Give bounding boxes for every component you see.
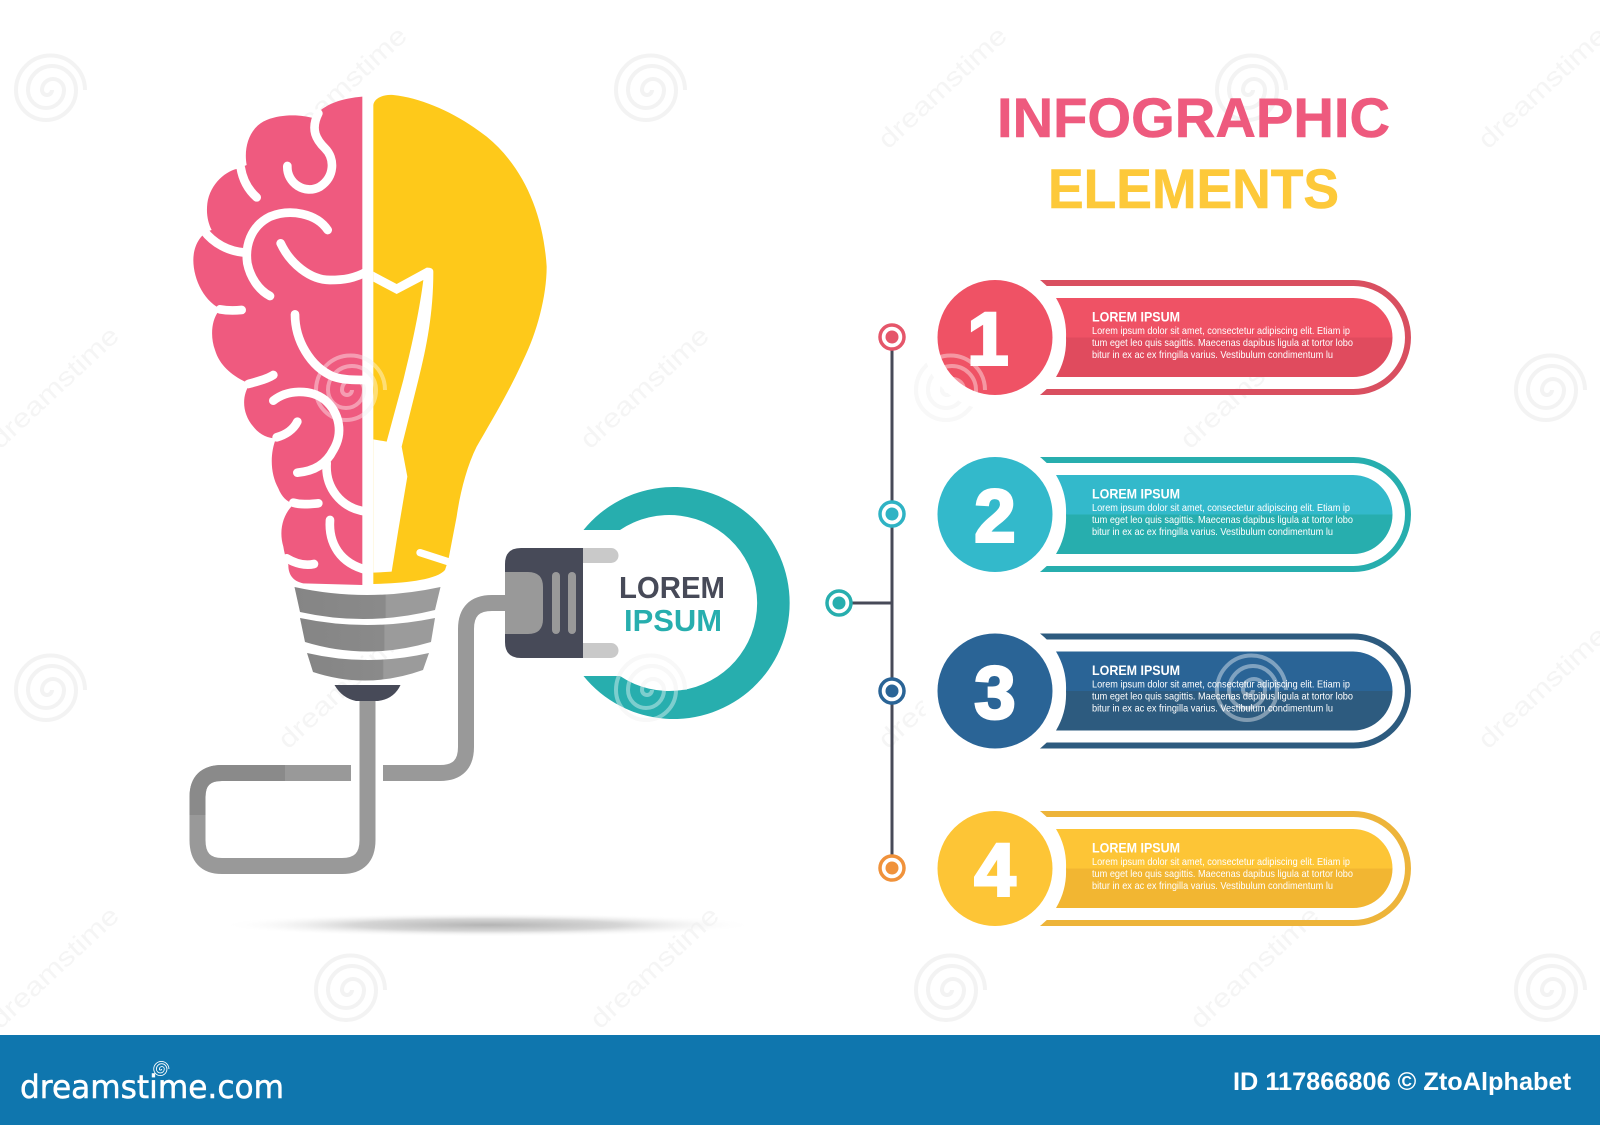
panel: step 1: LOREM IPSUM	[1092, 308, 1180, 324]
ring label: IPSUM	[624, 603, 722, 638]
watermark: background spirals and text: dreamstime	[1472, 20, 1600, 154]
watermark: background spirals and text: dreamstime	[1472, 620, 1600, 754]
panel: step 4: LOREM IPSUM	[1092, 840, 1180, 856]
title	[997, 86, 1390, 220]
panel: step 3	[922, 618, 1408, 764]
panel: step 4: bitur in ex ac ex fringilla varius. Vestibulum condimentum lu	[1092, 880, 1333, 892]
panel: step 4	[922, 796, 1408, 942]
panel: step 3: 3	[974, 651, 1016, 734]
watermark: background spirals and text: dreamstime	[1174, 320, 1315, 454]
panel: step 1: bitur in ex ac ex fringilla varius. Vestibulum condimentum lu	[1092, 349, 1333, 361]
timeline	[827, 325, 904, 880]
panel: step 1	[922, 264, 1408, 410]
plug	[505, 548, 618, 658]
footer logo: dreamstime.com	[20, 1068, 284, 1106]
title: ELEMENTS	[1048, 157, 1339, 220]
watermark: background spirals and text: dreamstime	[574, 320, 715, 454]
ring label	[619, 570, 725, 638]
watermark: background spirals and text: dreamstime	[1184, 900, 1325, 1034]
panel: step 2: LOREM IPSUM	[1092, 486, 1180, 502]
timeline dot: 1	[880, 325, 904, 349]
watermark: background spirals and text: dreamstime	[272, 20, 413, 154]
panel: step 2: tum eget leo quis sagittis. Maecenas dapibus ligula at tortor lobo	[1092, 514, 1353, 526]
panel: step 3: tum eget leo quis sagittis. Maecenas dapibus ligula at tortor lobo	[1092, 690, 1353, 702]
cable	[198, 603, 506, 866]
panel: step 2: bitur in ex ac ex fringilla varius. Vestibulum condimentum lu	[1092, 526, 1333, 538]
watermark: background spirals and text: dreamstime	[872, 620, 1013, 754]
watermark: spirals over artwork	[316, 356, 1286, 720]
timeline dot: 3	[880, 679, 904, 703]
title: INFOGRAPHIC	[997, 86, 1390, 149]
lamp base	[294, 587, 440, 701]
footer bar	[0, 1035, 1600, 1125]
ring badge	[584, 487, 790, 719]
panel: step 3: LOREM IPSUM	[1092, 662, 1180, 678]
panel: step 1: Lorem ipsum dolor sit amet, consectetur adipiscing elit. Etiam ip	[1092, 325, 1350, 337]
panel: step 3: bitur in ex ac ex fringilla varius. Vestibulum condimentum lu	[1092, 702, 1333, 714]
panel: step 1: tum eget leo quis sagittis. Maecenas dapibus ligula at tortor lobo	[1092, 337, 1353, 349]
panel: step 2	[922, 442, 1408, 588]
panel: step 4: Lorem ipsum dolor sit amet, consectetur adipiscing elit. Etiam ip	[1092, 856, 1350, 868]
timeline dot: 4	[880, 856, 904, 880]
brain half of bulb	[193, 97, 367, 585]
watermark: background spirals and text: dreamstime	[872, 20, 1013, 154]
timeline dot: left	[827, 591, 851, 615]
panel: step 2: Lorem ipsum dolor sit amet, consectetur adipiscing elit. Etiam ip	[1092, 502, 1350, 514]
light bulb half	[373, 95, 547, 584]
panel: step 3: Lorem ipsum dolor sit amet, consectetur adipiscing elit. Etiam ip	[1092, 678, 1350, 690]
watermark: background spirals and text: dreamstime	[584, 900, 725, 1034]
ground shadow	[220, 913, 756, 937]
footer credit: ID 117866806 © ZtoAlphabet	[1233, 1068, 1572, 1096]
timeline dot: 2	[880, 502, 904, 526]
ring label: LOREM	[619, 570, 725, 605]
panel: step 4: tum eget leo quis sagittis. Maecenas dapibus ligula at tortor lobo	[1092, 868, 1353, 880]
panel: step 4: 4	[974, 828, 1016, 912]
panel: step 2: 2	[974, 474, 1016, 558]
watermark: background spirals and text: dreamstime	[272, 620, 413, 754]
panel: step 1: 1	[967, 298, 1009, 380]
